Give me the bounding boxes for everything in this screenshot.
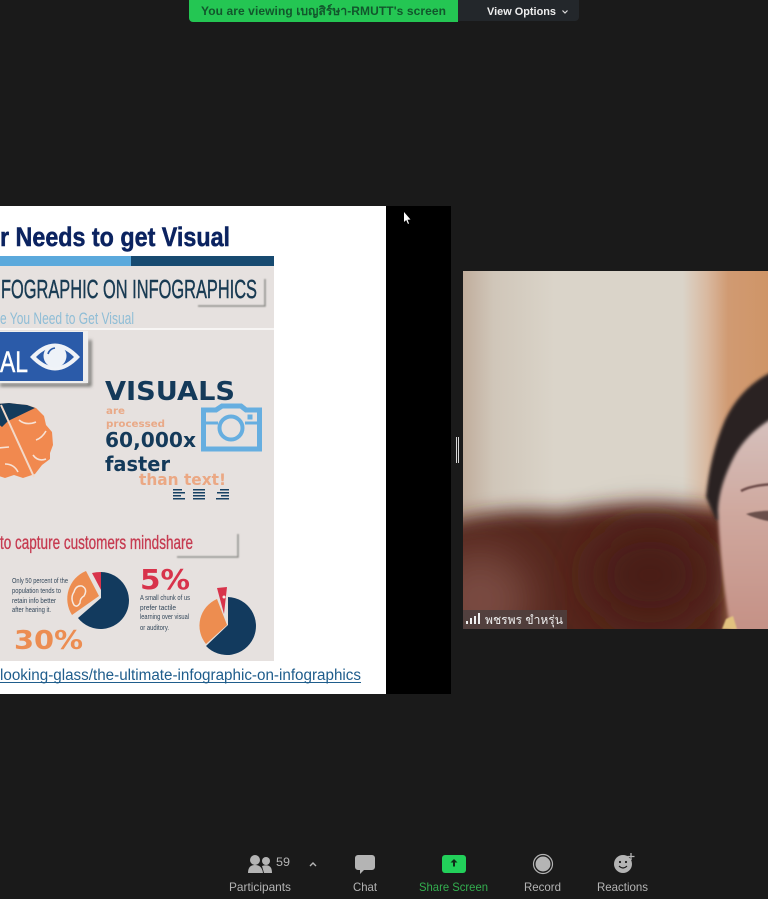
text block: visuals statistic: are (106, 406, 125, 417)
icon: green share arrow (442, 855, 466, 873)
icon: speech bubble (355, 855, 375, 874)
stat: 30 percent: 30% (14, 626, 83, 656)
button: reactions (597, 853, 648, 894)
collar (722, 616, 737, 629)
name tag (463, 610, 567, 629)
icon: camera (203, 406, 260, 449)
icon: smiley with plus (614, 853, 634, 873)
participant count: 59 (276, 855, 290, 869)
eye (746, 511, 768, 522)
icon: eye (30, 344, 80, 370)
icon: signal bars (466, 613, 480, 624)
panel: shared slide (0, 206, 386, 694)
button: chat (353, 855, 378, 894)
text block: visuals statistic: than text! (139, 470, 226, 489)
toolbar (229, 853, 648, 894)
text block: visuals statistic: 60,000x (105, 428, 196, 452)
icon: ear (72, 586, 86, 606)
stat: 5 percent: 5% (140, 563, 190, 596)
text block: auditory note: population tends to (12, 588, 61, 595)
text block: visuals statistic: VISUALS (105, 377, 235, 407)
eyebrow (741, 484, 768, 491)
top banner: viewing notice (189, 0, 579, 22)
pie chart: tactile learners (199, 587, 256, 655)
icon: chevron (562, 10, 568, 13)
sofa in the background (463, 487, 731, 629)
slide heading: r Needs to get Visual (0, 222, 230, 252)
hair (706, 365, 768, 520)
text block: auditory note (12, 578, 68, 614)
badge: visual eye (0, 331, 90, 385)
text block: visuals statistic: processed (106, 419, 165, 430)
view options button (458, 0, 579, 21)
button: participants (229, 855, 291, 894)
viewing text: You are viewing เบญสิร์ษา-RMUTT's screen (201, 4, 446, 18)
badge: visual eye: AL (0, 346, 28, 379)
infographic title: FOGRAPHIC ON INFOGRAPHICS (1, 274, 257, 304)
text block: tactile note: learning over visual (140, 614, 189, 621)
face (718, 410, 768, 640)
icon: people (248, 855, 272, 873)
text block: auditory note: Only 50 percent of the (12, 578, 68, 585)
pie chart: auditory learners (67, 571, 129, 629)
panel divider handle (456, 437, 458, 463)
person (706, 365, 768, 640)
black margin beside slide (386, 206, 451, 694)
label: Share Screen (419, 880, 488, 894)
source link: looking-glass/the-ultimate-infographic-on-infographics (0, 667, 361, 684)
icon: mouse cursor (404, 212, 410, 224)
text block: visuals statistic: faster (105, 452, 170, 476)
button: share screen (419, 855, 488, 894)
label: Participants (229, 880, 291, 894)
label: Reactions (597, 880, 648, 894)
top colour bar (0, 256, 274, 266)
label: Record (524, 880, 561, 894)
participant name: พชรพร ขำหรุ่น (485, 613, 563, 628)
green status pill (189, 0, 458, 22)
text block: tactile note: or auditory. (140, 625, 169, 632)
callout: capture customers mindshare: to capture customers mindshare (0, 533, 193, 554)
infographic subtitle: e You Need to Get Visual (0, 309, 134, 328)
text block: auditory note: after hearing it. (12, 607, 51, 614)
button: record (524, 854, 561, 894)
label: Chat (353, 880, 378, 894)
icon: text alignment lines (173, 489, 229, 500)
text block: tactile note: prefer tactile (140, 605, 176, 612)
text block: visuals statistic (105, 377, 235, 489)
text block: tactile note (140, 595, 190, 632)
icon: record circle (534, 854, 552, 874)
text block: auditory note: retain info better (12, 598, 57, 605)
panel: infographic (0, 256, 274, 661)
text block: tactile note: A small chunk of us (140, 595, 190, 602)
infographic title (1, 274, 265, 306)
icon: chevron up (310, 863, 316, 866)
view options label: View Options (487, 6, 556, 18)
panel: participant video (463, 271, 768, 629)
icon: brain (0, 403, 53, 478)
